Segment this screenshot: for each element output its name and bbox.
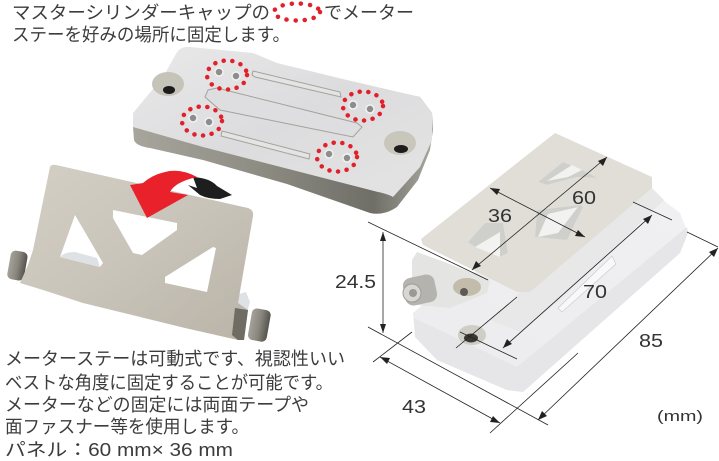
rotation arrow: black [188, 177, 232, 199]
dimension labels: 43 [402, 397, 426, 417]
rotation arrow: red [130, 171, 197, 218]
stay bolts [7, 250, 271, 342]
icon: red dotted ellipse legend [274, 4, 320, 20]
dimension labels: 70 [583, 282, 607, 302]
dimension labels [335, 188, 703, 425]
cap countersunk screw holes [152, 72, 416, 155]
photo: bracket assembled on cap [335, 133, 718, 433]
heading text: でメーター [324, 3, 414, 23]
dimension labels: 85 [639, 331, 663, 351]
socket bolt and clamp hole [401, 273, 481, 307]
dimension labels: 24.5 [335, 272, 376, 292]
dimension labels: 60 [572, 188, 596, 208]
dimension labels: (mm) [657, 408, 703, 425]
photo: meter stay plate [7, 165, 271, 342]
heading text [12, 3, 414, 45]
description text block: メーターなどの固定には両面テープや [5, 395, 309, 415]
description text block: メーターステーは可動式です、視認性いい [5, 349, 345, 369]
heading text: ステーを好みの場所に固定します。 [12, 25, 290, 45]
dimension lines [368, 157, 718, 433]
countersunk hole [458, 325, 486, 345]
dimension labels: 36 [488, 206, 512, 226]
photo: master cylinder cap [133, 47, 433, 214]
clamp [412, 252, 490, 308]
heading text: マスターシリンダーキャップの [12, 3, 270, 23]
cap mounting holes with red dotted circles [182, 60, 383, 172]
bracket plate [421, 133, 652, 292]
description text block [5, 349, 345, 460]
bracket base [413, 190, 688, 392]
dimension arrowheads [380, 157, 718, 423]
description text block: 面ファスナー等を使用します。 [5, 417, 249, 437]
description text block: ベストな角度に固定することが可能です。 [5, 373, 333, 393]
description text block: パネル：60 mm× 36 mm [5, 440, 233, 460]
cap grooves [205, 71, 362, 159]
